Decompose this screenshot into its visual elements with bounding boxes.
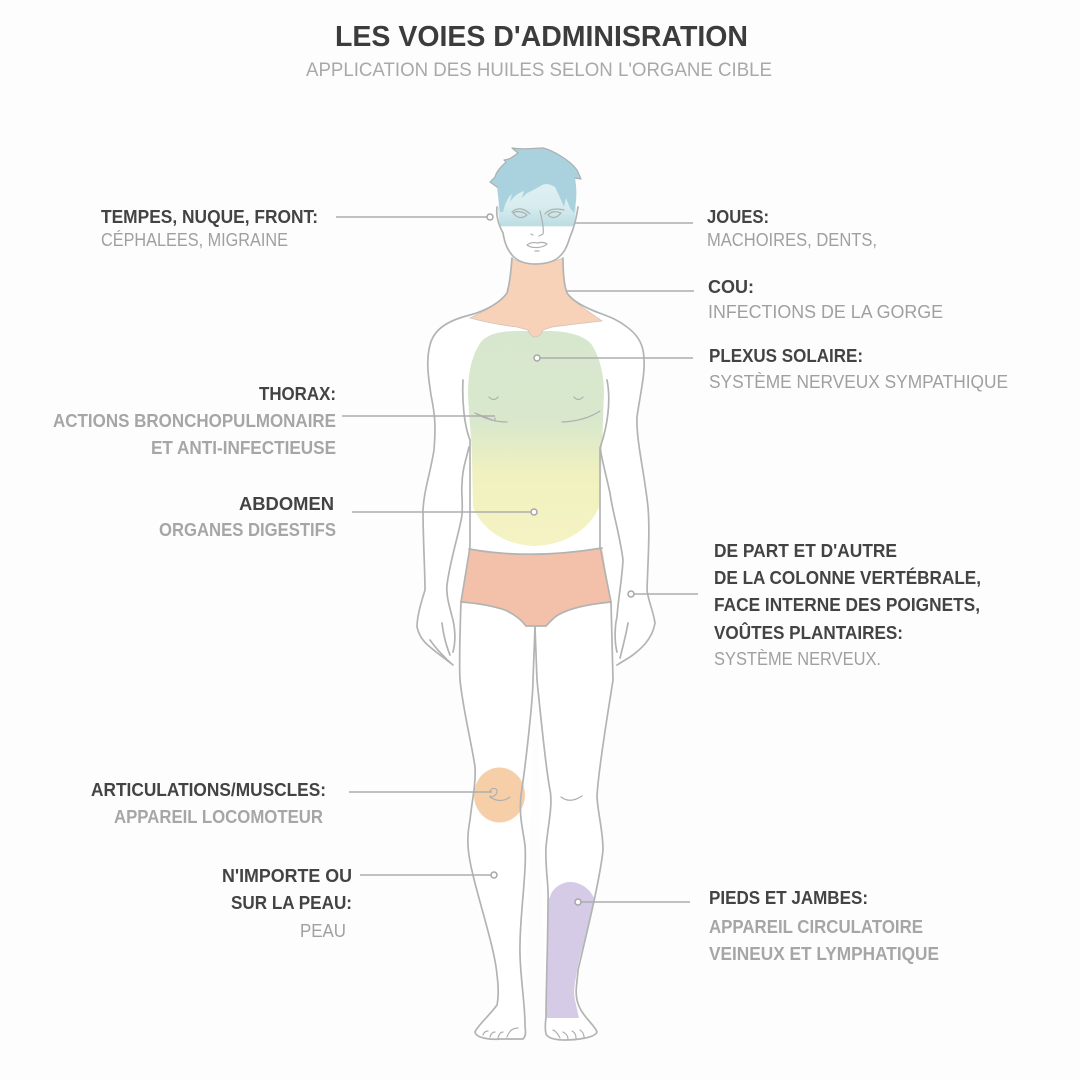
callout: abdomen: [159, 494, 537, 540]
title: LES VOIES D'ADMINISRATION: [335, 21, 748, 53]
face colour band: [498, 180, 576, 227]
callout: spine, wrists, soles: [628, 541, 981, 669]
callout: spine, wrists, soles: DE LA COLONNE VERTÉBRALE,: [714, 567, 981, 588]
callout: joints and muscles: APPAREIL LOCOMOTEUR: [114, 807, 323, 827]
callout: thorax: THORAX:: [259, 384, 336, 404]
body outlines: [417, 148, 655, 1040]
callout: neck: COU:: [708, 277, 754, 297]
callout: abdomen: ABDOMEN: [239, 494, 334, 514]
callout: joints and muscles: ARTICULATIONS/MUSCLES:: [91, 780, 326, 800]
body white fill: [417, 314, 655, 1040]
eyes, nose and mouth: [512, 209, 564, 251]
zone: knee: [474, 768, 525, 822]
callout: solar plexus: [534, 346, 1008, 392]
callout: anywhere on skin: N'IMPORTE OU: [222, 866, 352, 886]
hair outline: [490, 148, 581, 187]
callout: feet and legs: VEINEUX ET LYMPHATIQUE: [709, 944, 939, 964]
callout: cheeks: MACHOIRES, DENTS,: [707, 230, 877, 250]
callout: feet and legs: [575, 888, 939, 964]
callout: solar plexus: SYSTÈME NERVEUX SYMPATHIQUE: [709, 372, 1008, 392]
jaw and ears: [497, 207, 578, 264]
callout: anywhere on skin: PEAU: [300, 921, 346, 941]
callout: anywhere on skin: [222, 866, 497, 941]
callout: cheeks: [575, 207, 877, 250]
callout: neck: INFECTIONS DE LA GORGE: [708, 302, 943, 322]
callout: cheeks: JOUES:: [707, 207, 769, 227]
hair: [490, 148, 581, 213]
callout: anywhere on skin: SUR LA PEAU:: [231, 893, 352, 913]
hips outline: [461, 548, 611, 626]
face fill: [498, 175, 578, 264]
callout: spine, wrists, soles: FACE INTERNE DES POIGNETS,: [714, 595, 980, 615]
chest, knee and toe details: [475, 397, 600, 800]
callout: thorax: [53, 384, 495, 458]
callout: feet and legs: APPAREIL CIRCULATOIRE: [709, 917, 923, 937]
body figure: [417, 148, 655, 1040]
callout: temples: TEMPES, NUQUE, FRONT:: [101, 207, 318, 227]
callout: abdomen: ORGANES DIGESTIFS: [159, 520, 336, 540]
zone: torso, green and yellow: [468, 331, 604, 546]
callout: thorax: ET ANTI-INFECTIEUSE: [151, 438, 336, 458]
callout: solar plexus: PLEXUS SOLAIRE:: [709, 346, 863, 366]
callout: temples: [101, 207, 493, 250]
subtitle: APPLICATION DES HUILES SELON L'ORGANE CIBLE: [306, 59, 772, 81]
zone: hips: [461, 548, 611, 626]
callout: thorax: ACTIONS BRONCHOPULMONAIRE: [53, 411, 336, 431]
zone: lower leg: [546, 882, 595, 1018]
callout: temples: CÉPHALEES, MIGRAINE: [101, 230, 288, 250]
zone: neck and shoulders: [470, 258, 602, 337]
callout: joints and muscles: [91, 780, 492, 827]
callout: feet and legs: PIEDS ET JAMBES:: [709, 888, 868, 908]
callout: spine, wrists, soles: SYSTÈME NERVEUX.: [714, 649, 881, 669]
callout: spine, wrists, soles: VOÛTES PLANTAIRES:: [714, 622, 903, 643]
callout: neck: [567, 277, 943, 322]
callout: spine, wrists, soles: DE PART ET D'AUTRE: [714, 541, 897, 561]
